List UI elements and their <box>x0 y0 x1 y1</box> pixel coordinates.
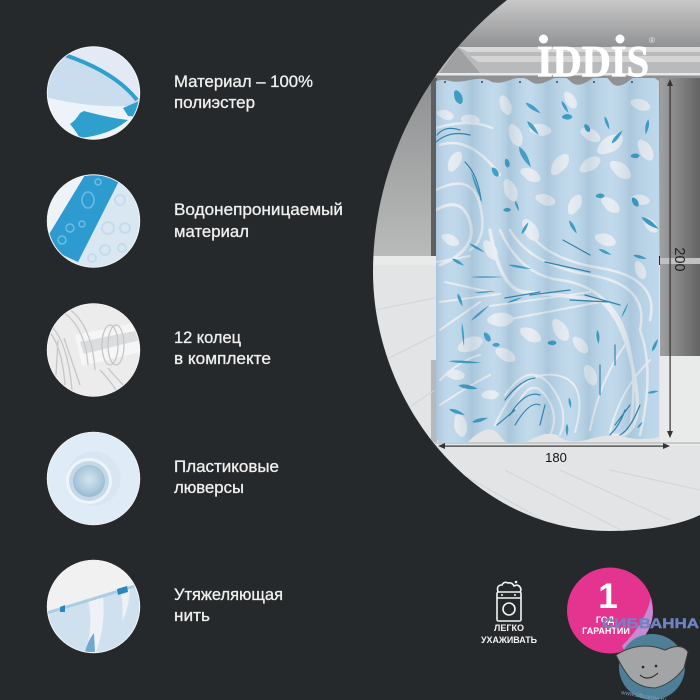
logo: ® <box>649 36 655 45</box>
text: weight thread: нить <box>174 606 210 625</box>
badge: warranty: 1 <box>598 577 618 616</box>
text: rings <box>174 328 271 368</box>
text: rings: 12 колец <box>174 328 241 347</box>
icon: weight thread ring <box>47 560 140 653</box>
icon: washing machine <box>497 581 521 621</box>
curtain folds <box>436 78 660 443</box>
curtain eyelets <box>444 81 633 83</box>
height label: 200 <box>671 247 687 272</box>
icon: material <box>45 47 140 140</box>
text: waterproof <box>174 200 343 241</box>
watermark <box>602 597 699 700</box>
icon: weight thread <box>47 560 140 655</box>
photo: bathroom with curtain <box>360 0 700 565</box>
text: waterproof: Водонепроницаемый <box>174 200 343 219</box>
icon: rings <box>48 304 140 396</box>
icon: material ring <box>47 47 140 139</box>
curtain teal pattern <box>448 89 660 436</box>
text: waterproof: материал <box>174 222 249 241</box>
curtain white swirl lines <box>436 123 651 435</box>
icon: grommet <box>48 432 140 524</box>
text: grommet: Пластиковые <box>174 457 279 476</box>
text: weight thread <box>174 585 283 625</box>
text: material: Материал – 100% <box>174 72 313 91</box>
badge: warranty: ГАРАНТИИ <box>582 626 630 636</box>
watermark: СИБВАННА <box>602 616 699 631</box>
dimension arrows <box>438 79 673 449</box>
text: rings: в комплекте <box>174 349 271 368</box>
text: easy care: ЛЕГКО <box>494 623 524 633</box>
width label: 180 <box>545 450 567 465</box>
icon: grommet ring <box>47 432 140 525</box>
text: grommet <box>174 457 279 497</box>
icon: waterproof <box>48 175 140 267</box>
badge: warranty: ГОД <box>596 615 615 625</box>
logo: IDDIS <box>537 37 649 86</box>
icon: waterproof ring <box>47 175 140 267</box>
text: material: полиэстер <box>174 93 255 112</box>
curtain <box>435 78 660 443</box>
curtain white blotches <box>435 89 660 438</box>
text: easy care: УХАЖИВАТЬ <box>481 635 538 645</box>
text: grommet: люверсы <box>174 478 244 497</box>
icon: rings ring <box>47 304 140 396</box>
text: easy care <box>481 623 538 645</box>
text: weight thread: Утяжеляющая <box>174 585 283 604</box>
badge: warranty <box>567 568 653 654</box>
text: material <box>174 72 313 112</box>
